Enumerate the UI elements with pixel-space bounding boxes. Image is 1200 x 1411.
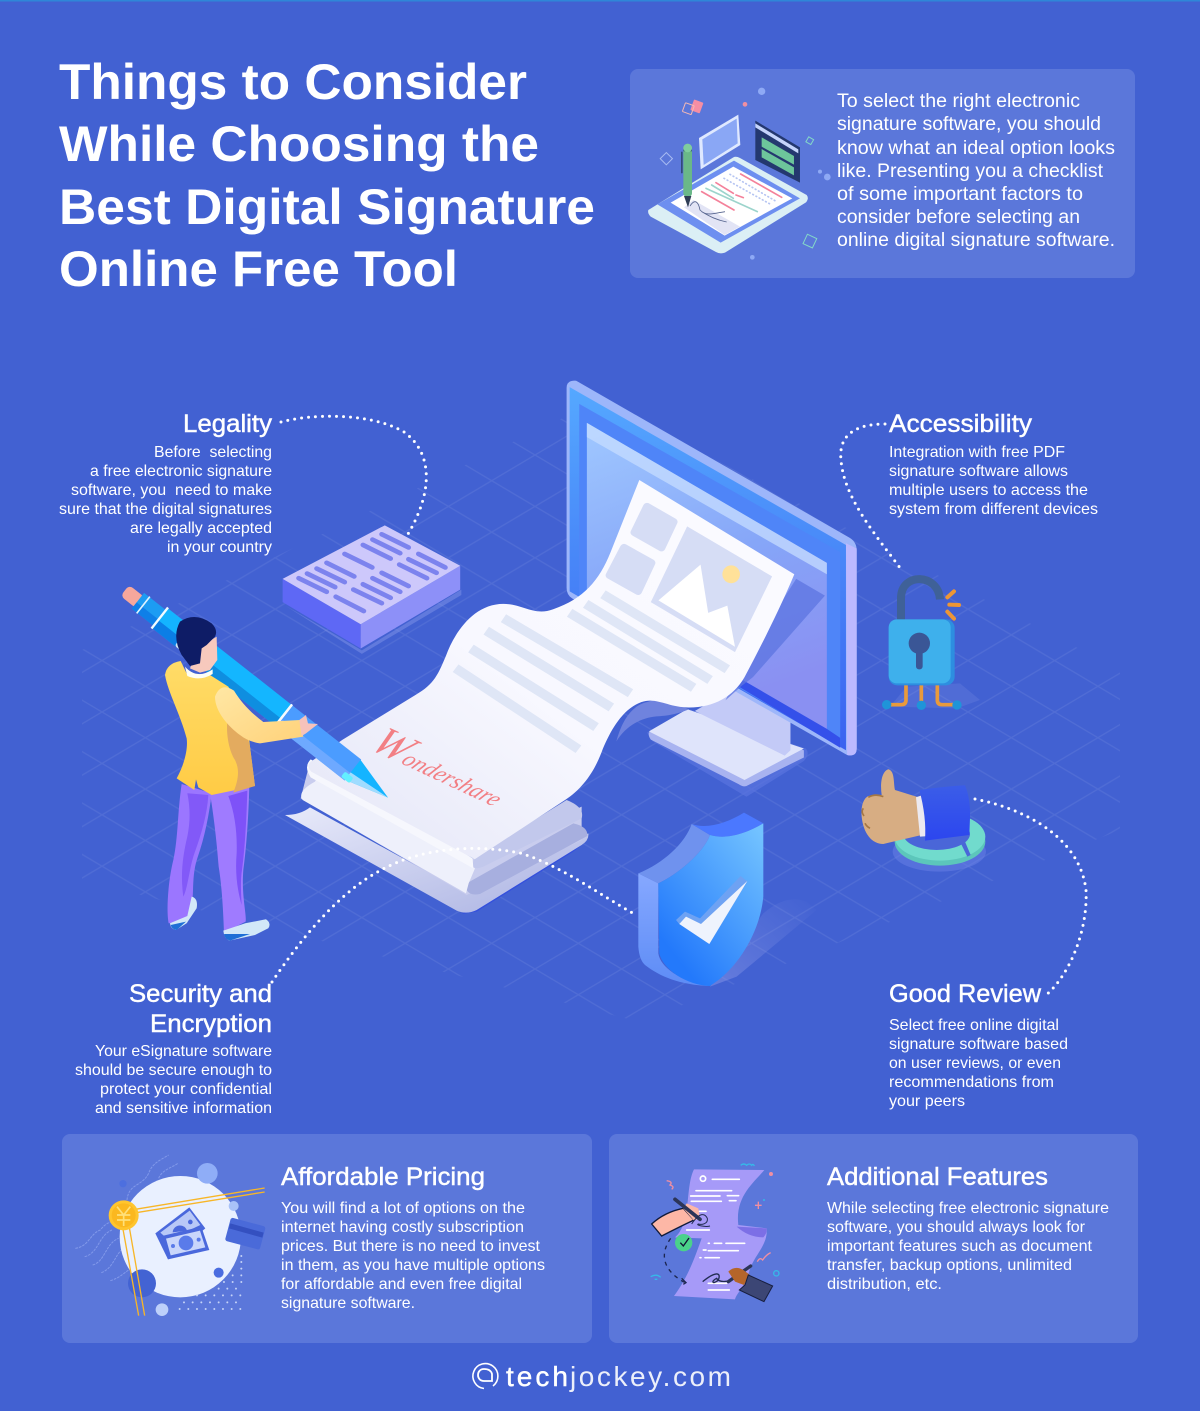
intro text: To select the right electronic — [837, 91, 1080, 112]
text: Accessibility: Integration with free PDF — [889, 444, 1065, 461]
text: Additional Features — [827, 1163, 1109, 1293]
man with giant pen — [116, 579, 397, 941]
footer logo: techjockey.com: jockey.com — [569, 1361, 731, 1392]
trousers — [168, 784, 249, 933]
panel: Additional Features — [609, 1134, 1138, 1343]
dotted connector: Good Review — [975, 799, 1086, 996]
text: Accessibility — [889, 410, 1098, 518]
text: Legality: Before selecting — [154, 444, 272, 461]
text: Additional Features: While selecting free electronic signature — [827, 1200, 1109, 1217]
text: Good Review: recommendations from — [889, 1074, 1054, 1091]
giant pen — [116, 579, 397, 809]
text: Accessibility: signature software allows — [889, 463, 1068, 480]
document sheet stack — [285, 759, 588, 914]
text: Security and Encryption — [75, 980, 272, 1117]
text: Affordable Pricing — [281, 1163, 545, 1312]
footer logo: techjockey.com: tech — [506, 1361, 568, 1392]
text: Good Review: signature software based — [889, 1036, 1068, 1053]
text: Affordable Pricing: in them, as you have multiple options — [281, 1257, 545, 1274]
icon: security shield — [638, 813, 817, 987]
text: Affordable Pricing: You will find a lot of options on the — [281, 1200, 525, 1217]
text: Good Review: on user reviews, or even — [889, 1055, 1061, 1072]
intro text: know what an ideal option looks — [837, 138, 1115, 159]
intro text: like. Presenting you a checklist — [837, 161, 1104, 182]
text: Legality: Legality — [183, 410, 273, 438]
text: Legality: a free electronic signature — [90, 463, 272, 480]
intro text: online digital signature software. — [837, 230, 1115, 251]
text: Legality: are legally accepted — [130, 520, 272, 537]
intro text — [837, 91, 1115, 251]
text: Good Review: your peers — [889, 1093, 965, 1110]
intro text: signature software, you should — [837, 114, 1101, 135]
monitor and stand — [567, 381, 857, 797]
icon: thumbs up — [861, 769, 986, 872]
text: Security and Encryption: Encryption — [150, 1010, 272, 1038]
text: Security and Encryption: should be secure enough to — [75, 1062, 272, 1079]
text: Legality: sure that the digital signatures — [59, 501, 272, 518]
panel: Affordable Pricing — [62, 1134, 592, 1343]
head — [176, 617, 217, 673]
text: Security and Encryption: and sensitive information — [95, 1100, 272, 1117]
dotted connector: Legality — [281, 416, 426, 534]
title: While Choosing the — [59, 116, 539, 172]
shoes — [170, 897, 270, 941]
text: Affordable Pricing: signature software. — [281, 1295, 415, 1312]
monitor stand — [647, 688, 808, 797]
icon: money and coin — [75, 1155, 266, 1316]
text: Additional Features: distribution, etc. — [827, 1276, 942, 1293]
signature: Wondershare — [361, 720, 520, 814]
icon: signed document with two hands — [651, 1164, 779, 1302]
text: Accessibility: multiple users to access the — [889, 482, 1088, 499]
text: Accessibility: system from different devices — [889, 501, 1098, 518]
text: Good Review — [889, 980, 1068, 1110]
flowing paper — [309, 480, 794, 859]
title — [59, 54, 595, 297]
monitor — [567, 381, 857, 755]
arm holding the pen — [215, 687, 318, 743]
text: Good Review: Select free online digital — [889, 1017, 1059, 1034]
dotted connector: Accessibility — [841, 424, 903, 572]
text: Security and Encryption: Security and — [129, 980, 272, 1008]
intro text: consider before selecting an — [837, 207, 1080, 228]
intro text: of some important factors to — [837, 184, 1083, 205]
title: Things to Consider — [59, 54, 527, 110]
footer logo: techjockey.com — [473, 1361, 731, 1392]
text: Security and Encryption: Your eSignature software — [95, 1043, 272, 1060]
yellow shirt — [165, 661, 255, 795]
text: Accessibility: Accessibility — [889, 410, 1033, 438]
text: Affordable Pricing: Affordable Pricing — [281, 1163, 485, 1191]
text: Affordable Pricing: internet having costly subscription — [281, 1219, 524, 1236]
text: Additional Features: transfer, backup options, unlimited — [827, 1257, 1072, 1274]
text: Affordable Pricing: prices. But there is no need to invest — [281, 1238, 541, 1255]
text: Good Review: Good Review — [889, 980, 1042, 1008]
text: Legality: software, you need to make — [71, 482, 272, 499]
icon: tablet with signature document — [648, 88, 831, 260]
text: Additional Features: software, you should always look for — [827, 1219, 1086, 1236]
text: Affordable Pricing: for affordable and even free digital — [281, 1276, 522, 1293]
panel: intro — [630, 69, 1135, 278]
text: Additional Features: Additional Features — [827, 1163, 1048, 1191]
text: Security and Encryption: protect your confidential — [100, 1081, 272, 1098]
title: Online Free Tool — [59, 241, 458, 297]
icon: text block — [283, 525, 461, 654]
dotted connector: Security — [272, 848, 636, 982]
title: Best Digital Signature — [59, 179, 595, 235]
text: Additional Features: important features such as document — [827, 1238, 1093, 1255]
icon: unlocked padlock — [882, 579, 980, 710]
text: Legality: in your country — [167, 539, 272, 556]
text: Legality — [59, 410, 273, 556]
